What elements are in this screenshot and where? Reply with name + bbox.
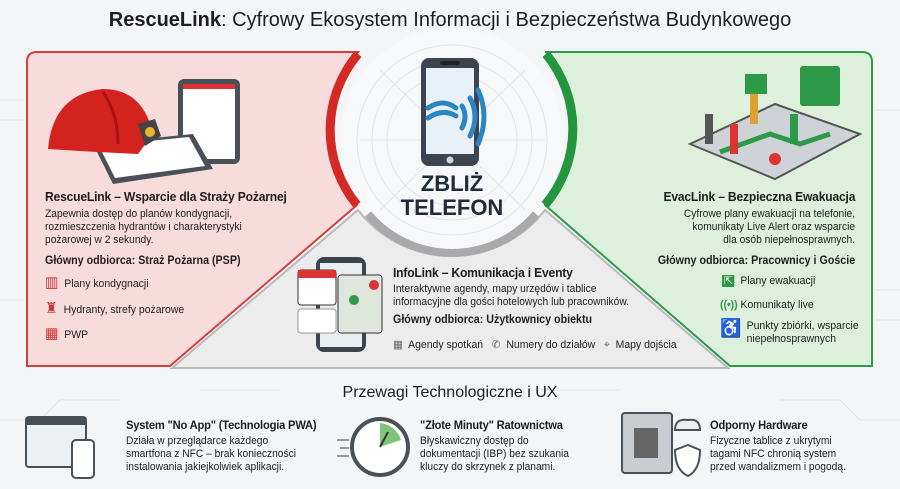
- description: Interaktywne agendy, mapy urzędów i tablice: [393, 283, 596, 295]
- panel: infolink: [298, 257, 677, 352]
- item: alerts: ((•)) Komunikaty live: [720, 299, 814, 311]
- advantage: no app: instalowania jakiejkolwiek aplikacji.: [126, 461, 284, 473]
- advantage: no app: System "No App" (Technologia PWA): [126, 418, 316, 432]
- item: assembly: Punkty zbiórki, wsparcie: [747, 320, 859, 332]
- illustration: helmet and tablets: [48, 79, 240, 184]
- illustration: phone with calendar and map: [298, 257, 382, 352]
- advantage: no app: smartfona z NFC – brak konieczności: [126, 448, 296, 460]
- panel: rescuelink: [45, 79, 287, 342]
- advantage: golden minutes: [337, 417, 569, 477]
- advantage: no app: Działa w przeglądarce każdego: [126, 435, 268, 447]
- title: RescueLink: Cyfrowy Ekosystem Informacji i Bezpieczeństwa Budynkowego: [109, 9, 791, 31]
- advantage: hardware: Fizyczne tablice z ukrytymi: [710, 435, 832, 447]
- center label: ZBLIŻ: [421, 171, 483, 196]
- center label: [400, 171, 503, 220]
- heading: RescueLink – Wsparcie dla Straży Pożarnej: [45, 189, 287, 204]
- icon: browser and phone: [25, 416, 95, 479]
- description: pożarowej w 2 sekundy.: [45, 234, 153, 246]
- description: komunikaty Live Alert oraz wsparcie: [692, 221, 855, 233]
- description: [45, 208, 242, 246]
- advantage: golden minutes: kluczy do skrzynek z planami.: [420, 461, 555, 473]
- item: PWP: ▦ PWP: [45, 325, 88, 342]
- advantage: hardware: [621, 412, 846, 478]
- items: ▦ Agendy spotkań ✆ Numery do działów ⌖ Mapy dojścia: [393, 339, 677, 351]
- section heading: advantages: Przewagi Technologiczne i UX: [343, 384, 557, 401]
- item: assembly: ♿: [720, 318, 741, 338]
- advantage: hardware: Odporny Hardware: [710, 418, 807, 432]
- advantage: no app: [25, 416, 316, 479]
- panel: evaclink: [658, 66, 862, 345]
- description: informacyjne dla gości hotelowych lub pracowników.: [393, 296, 629, 308]
- description: Zapewnia dostęp do planów kondygnacji,: [45, 208, 232, 220]
- item: plans: ▥ Plany kondygnacji: [45, 274, 149, 291]
- description: Cyfrowe plany ewakuacji na telefonie,: [684, 208, 855, 220]
- icon: NFC plate with cloud and shield: [621, 412, 701, 478]
- advantage: golden minutes: Błyskawiczny dostęp do: [420, 435, 529, 447]
- audience: Główny odbiorca: Użytkownicy obiektu: [393, 314, 592, 326]
- advantage: golden minutes: "Złote Minuty" Ratownictwa: [420, 418, 563, 432]
- item: hydrants: ♜ Hydranty, strefy pożarowe: [45, 300, 184, 317]
- illustration: evacuation map: [688, 66, 862, 180]
- advantage: golden minutes: dokumentacji (IBP) bez szukania: [420, 448, 569, 460]
- center label: TELEFON: [401, 195, 503, 220]
- heading: InfoLink – Komunikacja i Eventy: [393, 265, 573, 280]
- icon: stopwatch: [337, 417, 410, 477]
- description: dla osób niepełnosprawnych.: [723, 234, 855, 246]
- description: [684, 208, 855, 246]
- item: plans: ⇱ Plany ewakuacji: [724, 275, 815, 287]
- description: [393, 283, 629, 308]
- icon: center phone NFC: [421, 58, 486, 166]
- advantage: hardware: tagami NFC chronią system: [710, 448, 836, 460]
- heading: EvacLink – Bezpieczna Ewakuacja: [663, 189, 855, 204]
- item: assembly: niepełnosprawnych: [747, 333, 836, 345]
- description: rozmieszczenia hydrantów i charakterystyki: [45, 221, 242, 233]
- audience: Główny odbiorca: Straż Pożarna (PSP): [45, 255, 241, 267]
- audience: Główny odbiorca: Pracownicy i Goście: [658, 255, 855, 267]
- advantage: hardware: przed wandalizmem i pogodą.: [710, 461, 846, 473]
- item: assembly: [720, 318, 859, 345]
